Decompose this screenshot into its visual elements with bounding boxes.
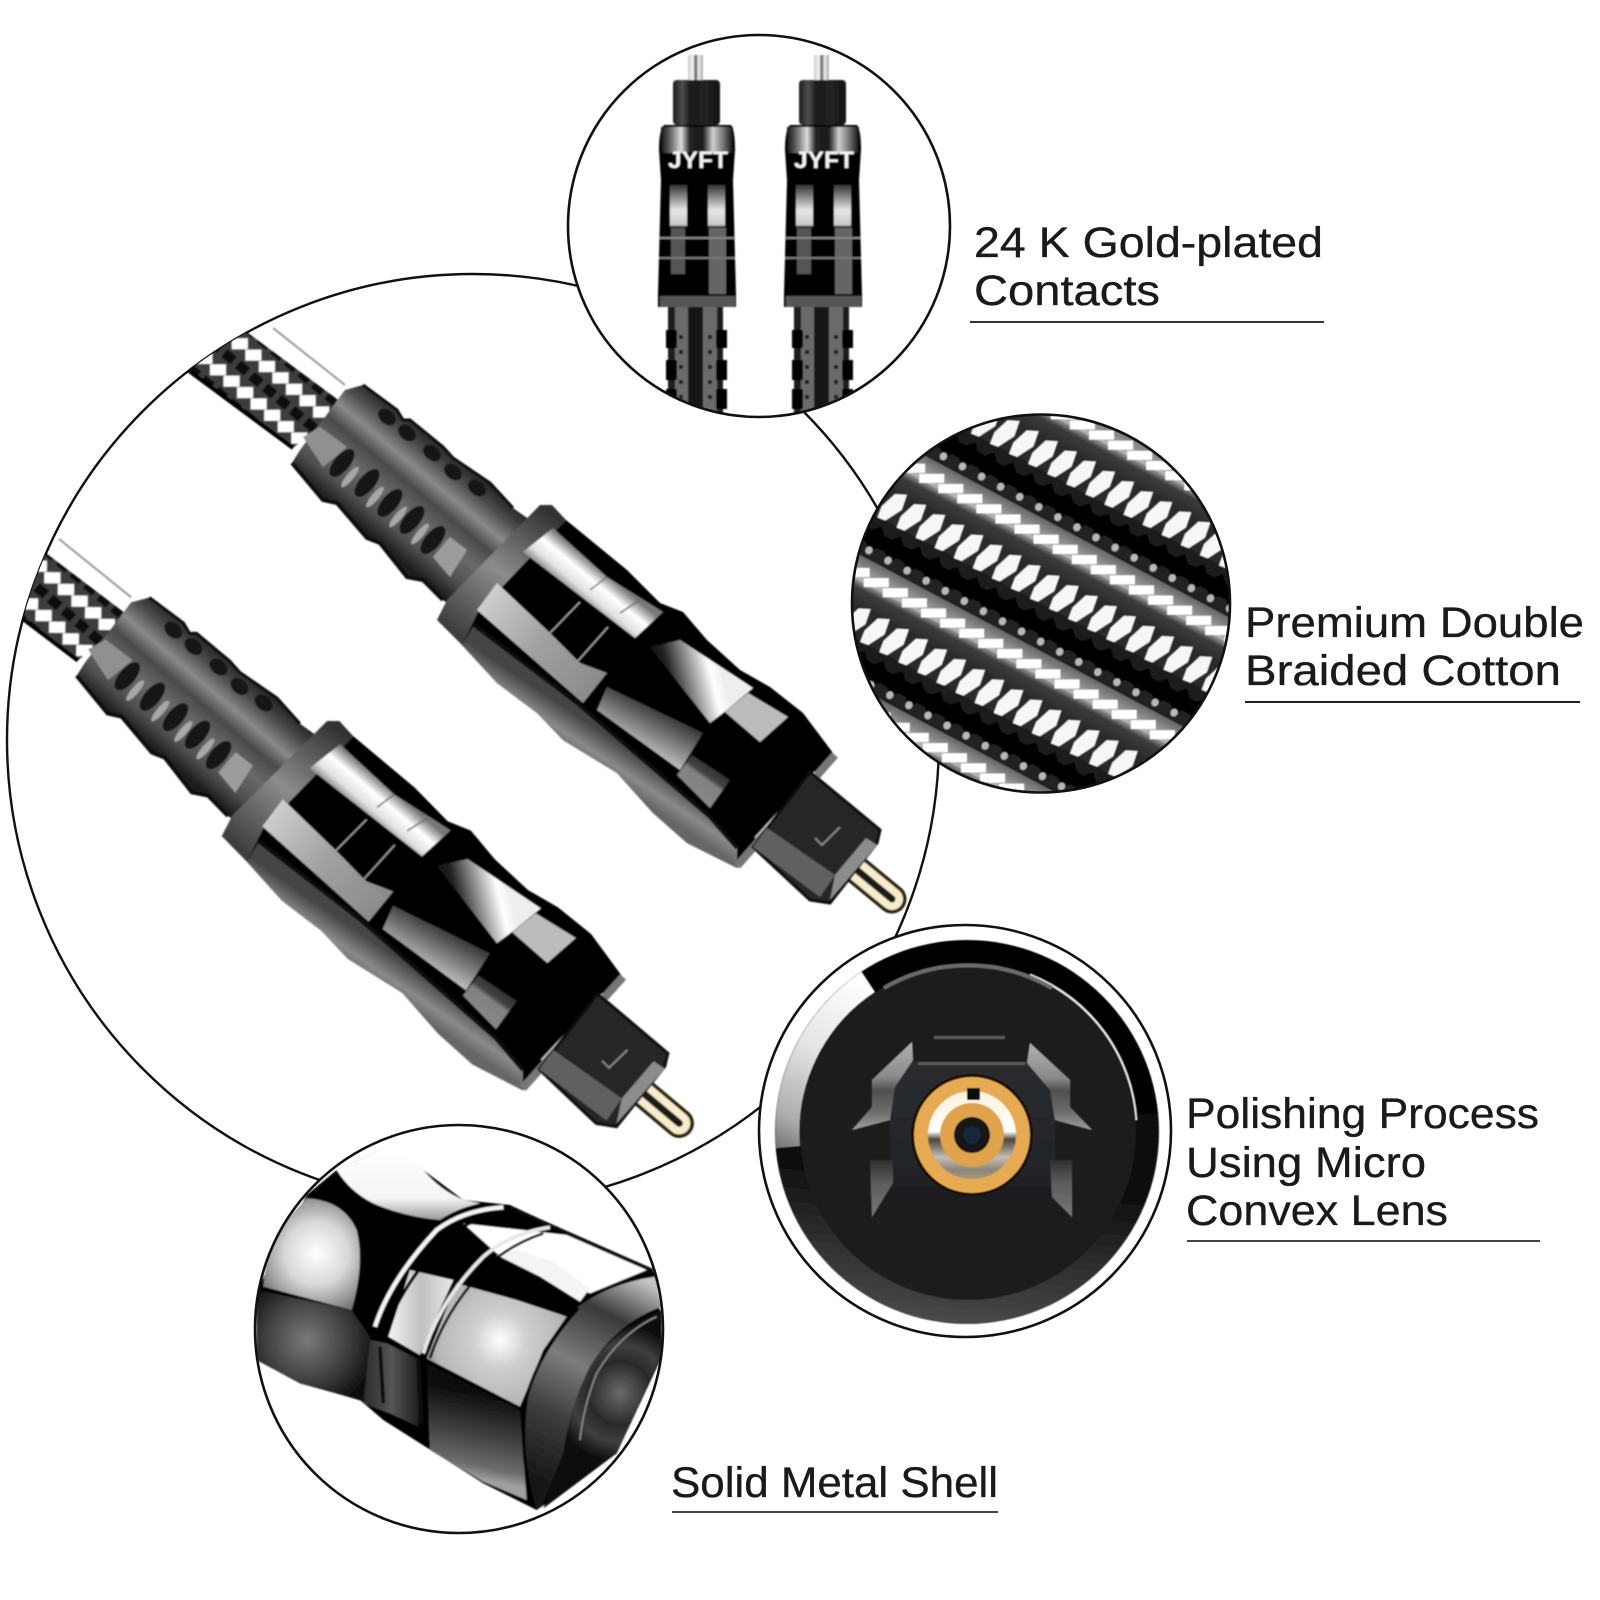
- label: polishing process: Convex Lens: [1186, 1187, 1448, 1235]
- metal shell close-up: [257, 1148, 663, 1510]
- panel: braided cotton circle: [840, 400, 1242, 808]
- label: braided cotton: Braided Cotton: [1245, 647, 1561, 695]
- label: gold-plated contacts: 24 K Gold-plated: [974, 219, 1323, 267]
- panel: polishing process circle: [759, 925, 1171, 1337]
- cable plug: upper: [150, 307, 892, 903]
- connector face disc: [800, 964, 1136, 1300]
- label: braided cotton: [1245, 599, 1584, 703]
- panel: gold-plated contacts circle: [568, 35, 950, 417]
- brand mark: right plug: JYFT: [794, 147, 854, 174]
- label: gold-plated contacts: Contacts: [974, 267, 1160, 315]
- cable plug: lower: [0, 516, 686, 1127]
- panel: main cable circle: [0, 274, 939, 1206]
- panel: solid metal shell circle: [255, 1125, 663, 1533]
- label: braided cotton: Premium Double: [1245, 599, 1584, 647]
- label: polishing process: Polishing Process: [1186, 1090, 1539, 1138]
- label: gold-plated contacts: [970, 219, 1324, 323]
- label: solid metal shell: Solid Metal Shell: [671, 1459, 998, 1507]
- braid texture: [854, 416, 1229, 792]
- plug pair, front view: [658, 55, 862, 417]
- gold contact: [911, 1074, 1033, 1196]
- brand mark: left plug: JYFT: [668, 147, 728, 174]
- socket wings: [852, 1036, 1092, 1217]
- connector outer ring: [775, 940, 1159, 1324]
- label: polishing process: [1186, 1090, 1540, 1242]
- label: polishing process: Using Micro: [1186, 1139, 1426, 1187]
